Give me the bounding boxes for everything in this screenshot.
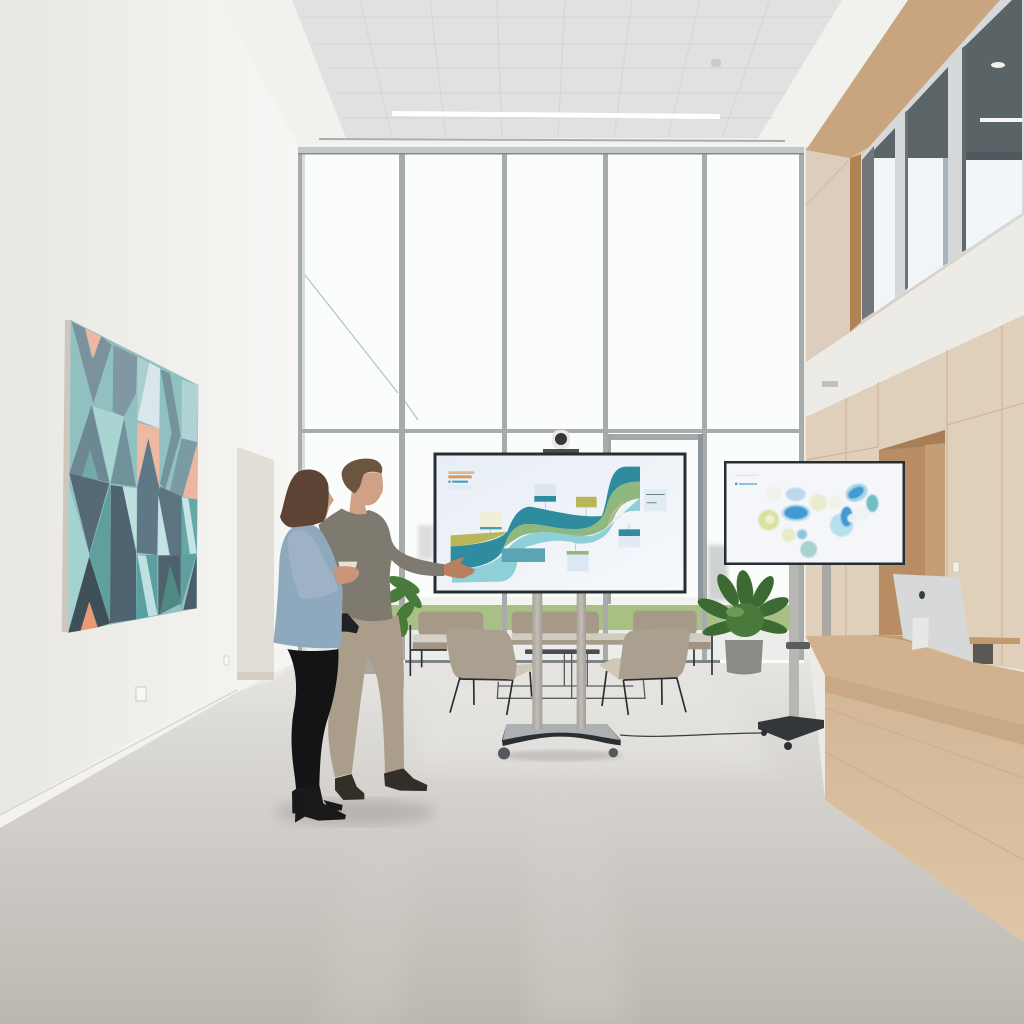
holding hand bbox=[334, 566, 359, 584]
floor shadow under people bbox=[275, 799, 435, 825]
brown recessed door bbox=[879, 430, 945, 635]
man bbox=[318, 459, 475, 800]
ceiling light strip bbox=[392, 111, 720, 119]
center sofa bbox=[512, 612, 627, 645]
furniture behind screen bbox=[410, 593, 712, 761]
glazed window wall bbox=[298, 147, 804, 663]
lower wood panels bbox=[806, 315, 1024, 670]
trousers bbox=[328, 615, 404, 777]
blazer sleeve bbox=[288, 530, 338, 599]
main screen stand bbox=[497, 593, 623, 761]
face and neck bbox=[349, 472, 383, 514]
left sofa bbox=[410, 612, 483, 676]
right screen bbox=[724, 461, 905, 565]
belt bag bbox=[342, 613, 359, 633]
chair left bbox=[446, 628, 533, 715]
plant behind man bbox=[362, 572, 425, 674]
right sofa bbox=[633, 611, 712, 675]
sweater and arm bbox=[318, 508, 445, 621]
camera above main screen bbox=[543, 430, 579, 453]
bubble chart on right screen bbox=[735, 475, 878, 558]
hair bbox=[280, 469, 329, 527]
woman bbox=[273, 469, 359, 823]
monitor bbox=[893, 574, 973, 662]
blazer bbox=[273, 524, 343, 648]
potted plant bbox=[695, 569, 791, 674]
left wall bbox=[0, 0, 300, 828]
desk bbox=[806, 635, 1024, 942]
leggings bbox=[287, 649, 338, 788]
right screen stand bbox=[758, 565, 831, 750]
cable on floor bbox=[620, 733, 762, 736]
white wall band on right bbox=[806, 215, 1024, 417]
boots bbox=[292, 785, 346, 823]
hair bbox=[342, 459, 382, 493]
table top bbox=[525, 649, 600, 654]
wall switch bbox=[953, 562, 959, 572]
wall outlets bbox=[136, 656, 229, 701]
chair right bbox=[599, 628, 690, 715]
main screen bbox=[434, 452, 686, 594]
shoes bbox=[335, 768, 427, 800]
floor bbox=[0, 660, 1024, 1024]
face bbox=[322, 485, 334, 522]
hand bbox=[444, 557, 475, 578]
back counter bbox=[870, 635, 1020, 664]
ceiling slot above window bbox=[319, 138, 785, 142]
painting bbox=[62, 320, 198, 633]
doorway in left wall bbox=[237, 447, 274, 680]
right wall wood band and upper windows bbox=[806, 0, 1024, 367]
flow chart on main screen bbox=[448, 467, 667, 583]
coffee cup bbox=[338, 562, 357, 569]
ceiling bbox=[220, 0, 908, 148]
table frame bbox=[497, 654, 645, 698]
